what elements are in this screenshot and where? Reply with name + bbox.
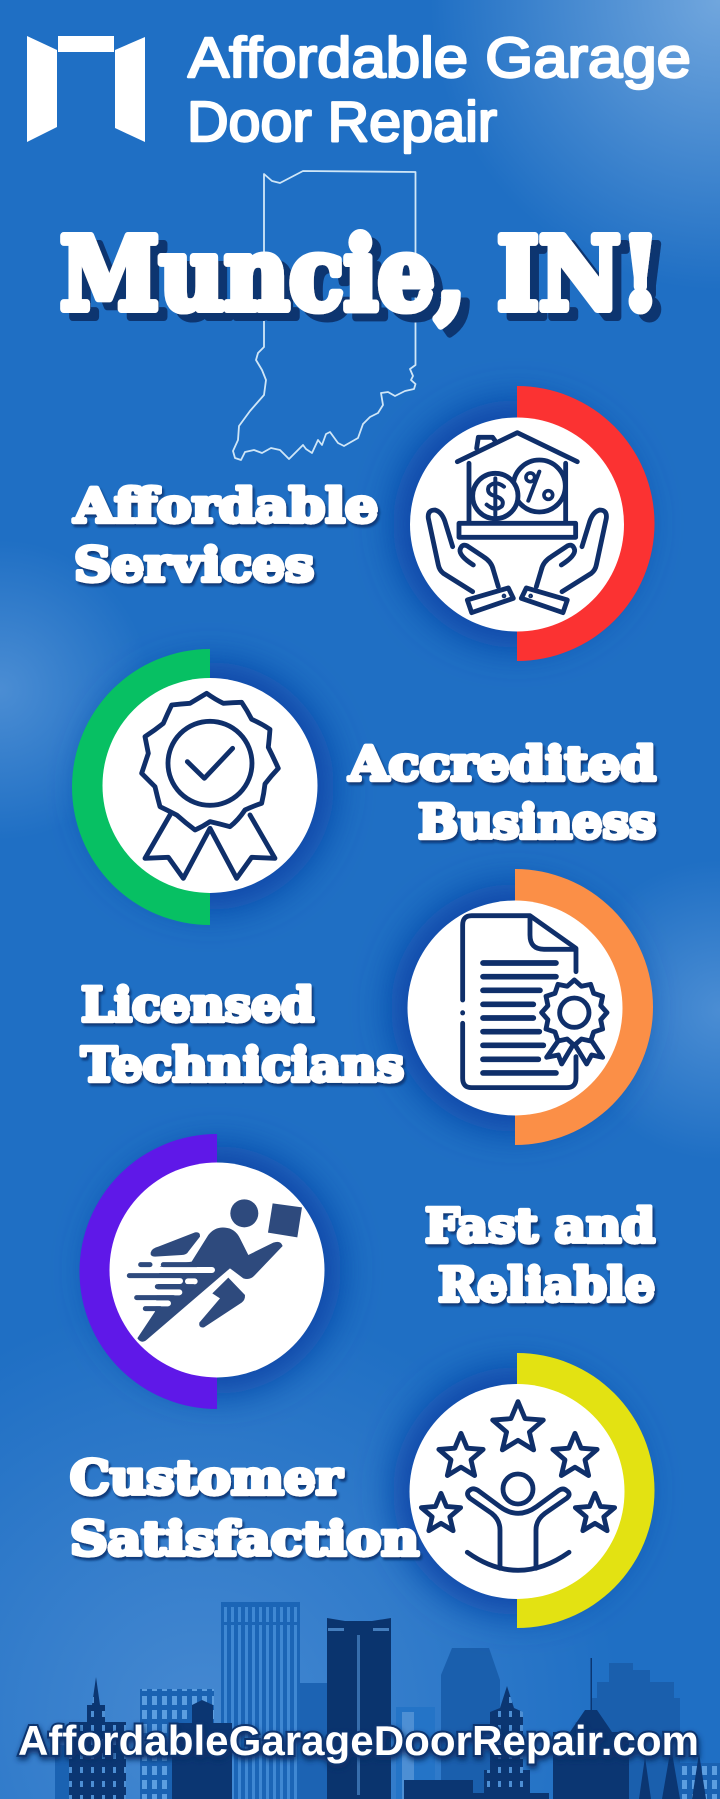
green half ring bbox=[72, 649, 210, 925]
logo text bbox=[187, 26, 691, 154]
logo text: Affordable Garage bbox=[188, 26, 691, 90]
label: Satisfaction bbox=[70, 1512, 419, 1567]
Indiana state outline bbox=[233, 171, 416, 460]
icon: house and money in hands bbox=[428, 433, 606, 613]
label: Accredited bbox=[348, 737, 656, 792]
feature 5: Customer Satisfaction bbox=[70, 1353, 655, 1628]
label: Business bbox=[418, 795, 656, 850]
yellow half ring bbox=[517, 1353, 655, 1628]
label: Customer bbox=[70, 1451, 343, 1506]
feature 1: Affordable Services bbox=[73, 386, 655, 661]
white circle bbox=[408, 900, 622, 1116]
orange half ring bbox=[515, 869, 653, 1145]
feature 3: Licensed Technicians bbox=[81, 869, 653, 1145]
label: Reliable bbox=[438, 1258, 655, 1313]
label bbox=[70, 1451, 419, 1567]
label: Services bbox=[74, 538, 314, 593]
red half ring bbox=[517, 386, 655, 661]
icon: award rosette bbox=[142, 693, 278, 878]
website URL: AffordableGarageDoorRepair.com bbox=[18, 1717, 699, 1764]
logo mark: garage door frame bbox=[27, 36, 145, 142]
purple half ring bbox=[80, 1134, 217, 1409]
icon: running figure with package bbox=[123, 1199, 302, 1342]
city skyline bbox=[55, 1602, 720, 1799]
icon: certificate document bbox=[463, 916, 607, 1088]
label: Fast and bbox=[425, 1199, 655, 1254]
feature 4: Fast and Reliable bbox=[80, 1134, 655, 1409]
white circle bbox=[410, 418, 624, 632]
white circle bbox=[110, 1162, 324, 1378]
label bbox=[81, 978, 404, 1093]
label bbox=[73, 479, 378, 593]
label: Licensed bbox=[81, 978, 314, 1033]
white circle bbox=[410, 1384, 624, 1599]
white circle bbox=[102, 678, 318, 893]
label bbox=[348, 737, 656, 850]
label bbox=[425, 1199, 655, 1313]
feature 2: Accredited Business bbox=[72, 649, 656, 925]
icon: person with five stars bbox=[421, 1402, 615, 1570]
label: Technicians bbox=[81, 1038, 404, 1093]
title: Muncie, IN!: Muncie, IN! bbox=[60, 215, 660, 333]
logo text: Door Repair bbox=[187, 90, 497, 154]
label: Affordable bbox=[73, 479, 378, 534]
